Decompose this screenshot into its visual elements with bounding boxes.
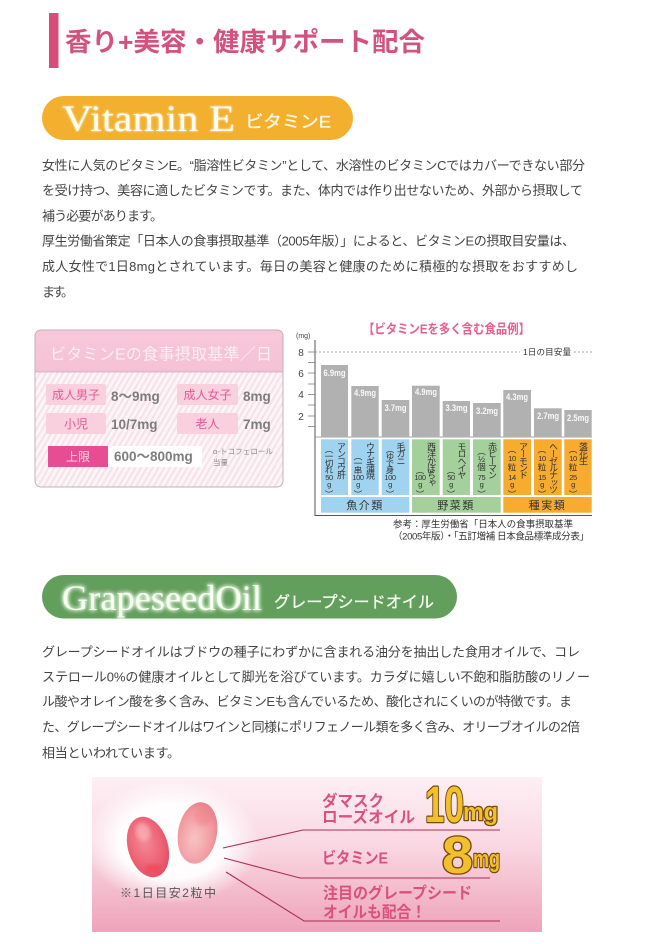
row: elderly: 老人 [195,417,220,431]
row: adult male [46,384,160,405]
food names: 粒 [507,462,517,472]
heading: Vitamin E: Vitamin E [62,99,235,140]
row: child: 小児 [64,417,88,431]
ingredient: damask rose oil [322,776,498,833]
panel: daily intake standard [35,330,283,487]
row: child: 10/7mg [111,417,158,432]
row: adult male: 成人男子 [52,388,100,402]
food names: （ [507,445,517,454]
food names: g [480,480,484,489]
chart title: 【ビタミンEを多く含む食品例】 [363,322,530,336]
row: adult female: 8mg [243,389,271,404]
category: nuts: 種実類 [529,498,566,512]
food names: 50 [325,473,333,482]
ingredient: vitamin E [322,827,500,885]
heading: Grapeseed Oil [42,575,457,618]
ingredient: vitamin E: mg [473,846,500,873]
food names: g [356,480,360,489]
row: upper limit [48,446,274,467]
daily guideline: 1日の目安量 [523,347,571,357]
food names: ） [568,489,578,497]
ingredient: grapeseed oil: 注目のグレープシード [323,884,472,902]
food names: 50 [447,473,455,482]
ingredient: damask rose oil: 10 [425,776,464,833]
category: nuts [503,497,592,513]
food names: g [571,480,575,489]
bar values: 4.9mg [354,388,376,398]
source note [393,518,589,542]
food names: 西洋かぼちゃ [426,442,436,487]
ingredient: vitamin E: ビタミンE [322,848,388,868]
food names: ） [415,489,425,497]
category: seafood [321,497,409,513]
heading: Vitamin E: ビタミンE [245,112,331,132]
bar values: 4.9mg [415,387,437,397]
panel: capsule ingredients [84,776,542,932]
text block: Vitamin E description: 厚生労働省策定「日本人の食事摂取基準（2005年版）」によると、ビタミンEの摂取目安量は、 [42,234,575,248]
row: upper limit: α-トコフェロール [213,447,274,456]
heading: Grapeseed Oil: GrapeseedOil [62,578,262,618]
row: elderly: 7mg [243,417,271,432]
ingredient: damask rose oil: mg [463,799,498,826]
row: upper limit: 当量 [213,457,228,467]
text block: Grapeseed oil description [42,644,590,760]
food names: （ [568,445,578,454]
row: adult female [177,384,271,405]
food names: ヘーゼルナッツ [548,442,558,493]
text block: Grapeseed oil description: ル酸やオレイン酸を多く含み、ビタミンEも含んでいるため、酸化されにくいのが特徴です。ま [42,694,572,709]
food names: ） [353,489,363,497]
food names: アンコウ肝 [336,442,346,481]
row: adult female: 成人女子 [183,388,232,402]
bar chart: foods rich in vitamin E [296,322,592,542]
bar values: 3.7mg [384,403,406,413]
food boxes [321,439,592,495]
panel header: ビタミンEの食事摂取基準／日 [50,346,272,364]
row: child [46,413,158,434]
panel header [35,330,283,372]
category: vegetables [412,497,501,513]
capsule glow [84,780,260,904]
food names: （ [537,445,547,454]
food names [324,441,588,497]
text block: Grapeseed oil description: ステロール0%の健康オイルとして脚光を浴びています。カラダに嬉しい不飽和脂肪酸のリノー [42,670,590,684]
bars [321,365,592,437]
food names: 粒 [568,462,578,472]
source note: （2005年版）・「五訂増補 日本食品標準成分表」 [393,530,589,542]
food names: g [327,480,331,489]
food names: （ [415,466,425,475]
category: seafood: 魚介類 [346,499,384,512]
food names: 14 [508,473,516,482]
bar values: 4.3mg [506,392,528,402]
bar values: 2.5mg [567,413,589,423]
row: upper limit: 上限 [66,450,90,464]
food names: （½個 [476,447,486,472]
text block: Vitamin E description: を受け持つ、美容に適したビタミンです。また、体内では作り出せないため、外部から摂取して [42,183,583,198]
axes: (mg) [296,333,310,340]
row: upper limit: 600～800mg [114,449,193,464]
food names: 毛ガニ [396,441,406,464]
ingredient: damask rose oil: ダマスク [322,792,384,810]
food names: ） [507,489,517,497]
food names: 10 [538,454,546,463]
text block: Vitamin E description [42,158,585,300]
food names: （一串 [353,452,363,475]
food names: 10 [508,454,516,463]
text block: Grapeseed oil description: グレープシードオイルはブドウの種子にわずかに含まれる油分を抽出した食用オイルで、コレ [42,644,580,660]
ingredient: vitamin E: 8 [442,827,473,885]
icon: capsule right [173,799,222,867]
axes [296,333,592,516]
food names: g [510,480,514,489]
dosage note: ※1日目安2粒中 [120,885,216,900]
food names: （一切れ [324,445,334,474]
bar values: 2.7mg [537,411,559,421]
food names: ウナギ蒲焼 [365,442,375,481]
food names: ） [385,489,395,497]
text block: Vitamin E description: 女性に人気のビタミンE。“脂溶性ビタミン”として、水溶性のビタミンCではカバーできない部分 [42,158,585,173]
text block: Grapeseed oil description: 相当といわれています。 [42,746,180,760]
heading: Grapeseed Oil: グレープシードオイル [274,594,434,612]
food names: 粒 [537,462,547,472]
food names: ） [324,489,334,497]
food names: g [540,480,544,489]
row: elderly [177,413,271,434]
food names: 落花生 [578,441,588,465]
food names: 75 [478,473,485,482]
food names: 15 [538,473,546,482]
axes: 4 [298,390,304,401]
category: vegetables: 野菜類 [437,499,475,512]
food names: 100 [352,473,364,482]
food names: g [388,480,392,489]
text block: Vitamin E description: 成人女性で1日8mgとされています。毎日の美容と健康のために積極的な摂取をおすすめし [42,259,578,274]
food names: 10 [569,454,577,463]
axes: 8 [298,348,304,359]
food names: g [449,480,453,489]
heading: Vitamin E [42,96,353,140]
food names: ） [476,489,486,497]
ingredient: grapeseed oil: オイルも配合！ [323,904,426,922]
leader lines [223,830,500,921]
food names: g [418,480,422,489]
food names: （ゆで身 [385,445,395,475]
food names: アーモンド [518,442,528,480]
food names: ） [446,489,456,497]
food names: （ [446,466,456,475]
axes: 2 [298,412,304,423]
title: 香り+美容・健康サポート配合 [65,27,425,57]
food names: 100 [384,473,396,482]
text block: Vitamin E description: ます。 [42,284,74,300]
source note: 参考：厚生労働省「日本人の食事摂取基準 [393,518,573,530]
text block: Vitamin E description: 補う必要があります。 [42,208,163,224]
ingredient: grapeseed oil [323,884,472,922]
bar values: 6.9mg [324,368,346,378]
ingredient: damask rose oil: ローズオイル [322,808,415,826]
food names: 25 [569,473,577,482]
bar values [324,368,589,423]
food names: ） [537,489,547,497]
food names: モロヘイヤ [456,442,466,480]
title [49,13,425,68]
row: adult male: 8～9mg [111,389,160,404]
food names: 赤ピーマン [487,442,497,479]
bar values: 3.2mg [476,406,498,416]
text block: Grapeseed oil description: た、グレープシードオイルはワインと同様にポリフェノール類を多く含み、オリーブオイルの2倍 [42,720,580,734]
axes: 6 [298,369,304,380]
icon: capsule left [120,812,176,882]
food names: 100 [414,473,426,482]
bar values: 3.3mg [446,403,468,413]
